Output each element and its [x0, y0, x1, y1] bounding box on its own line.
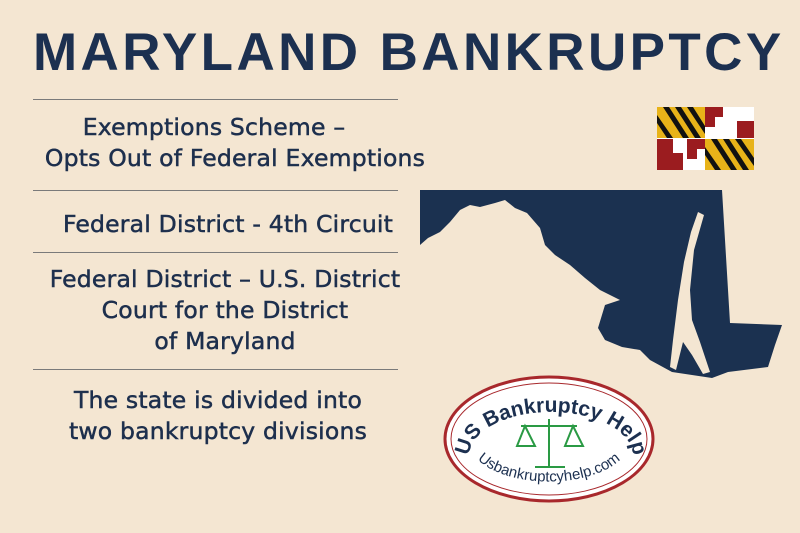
- flag: [657, 107, 754, 170]
- text: exemptions: [45, 113, 425, 172]
- text: court: Federal District – U.S. District: [50, 265, 400, 293]
- logo: Usbankruptcyhelp.com: [480, 452, 620, 484]
- title: MARYLAND BANKRUPTCY: [33, 23, 785, 82]
- text: divisions: [69, 386, 367, 445]
- logo: US Bankruptcy Help: [454, 398, 644, 454]
- text: circuit: Federal District - 4th Circuit: [63, 210, 393, 238]
- text: court: [50, 265, 400, 355]
- text: court: of Maryland: [154, 327, 296, 355]
- text: divisions: The state is divided into: [74, 386, 362, 414]
- text: exemptions: Exemptions Scheme –: [83, 113, 345, 141]
- text: divisions: two bankruptcy divisions: [69, 417, 367, 445]
- text: court: Court for the District: [102, 296, 348, 324]
- logo: [444, 376, 654, 502]
- text: exemptions: Opts Out of Federal Exemptions: [45, 144, 425, 172]
